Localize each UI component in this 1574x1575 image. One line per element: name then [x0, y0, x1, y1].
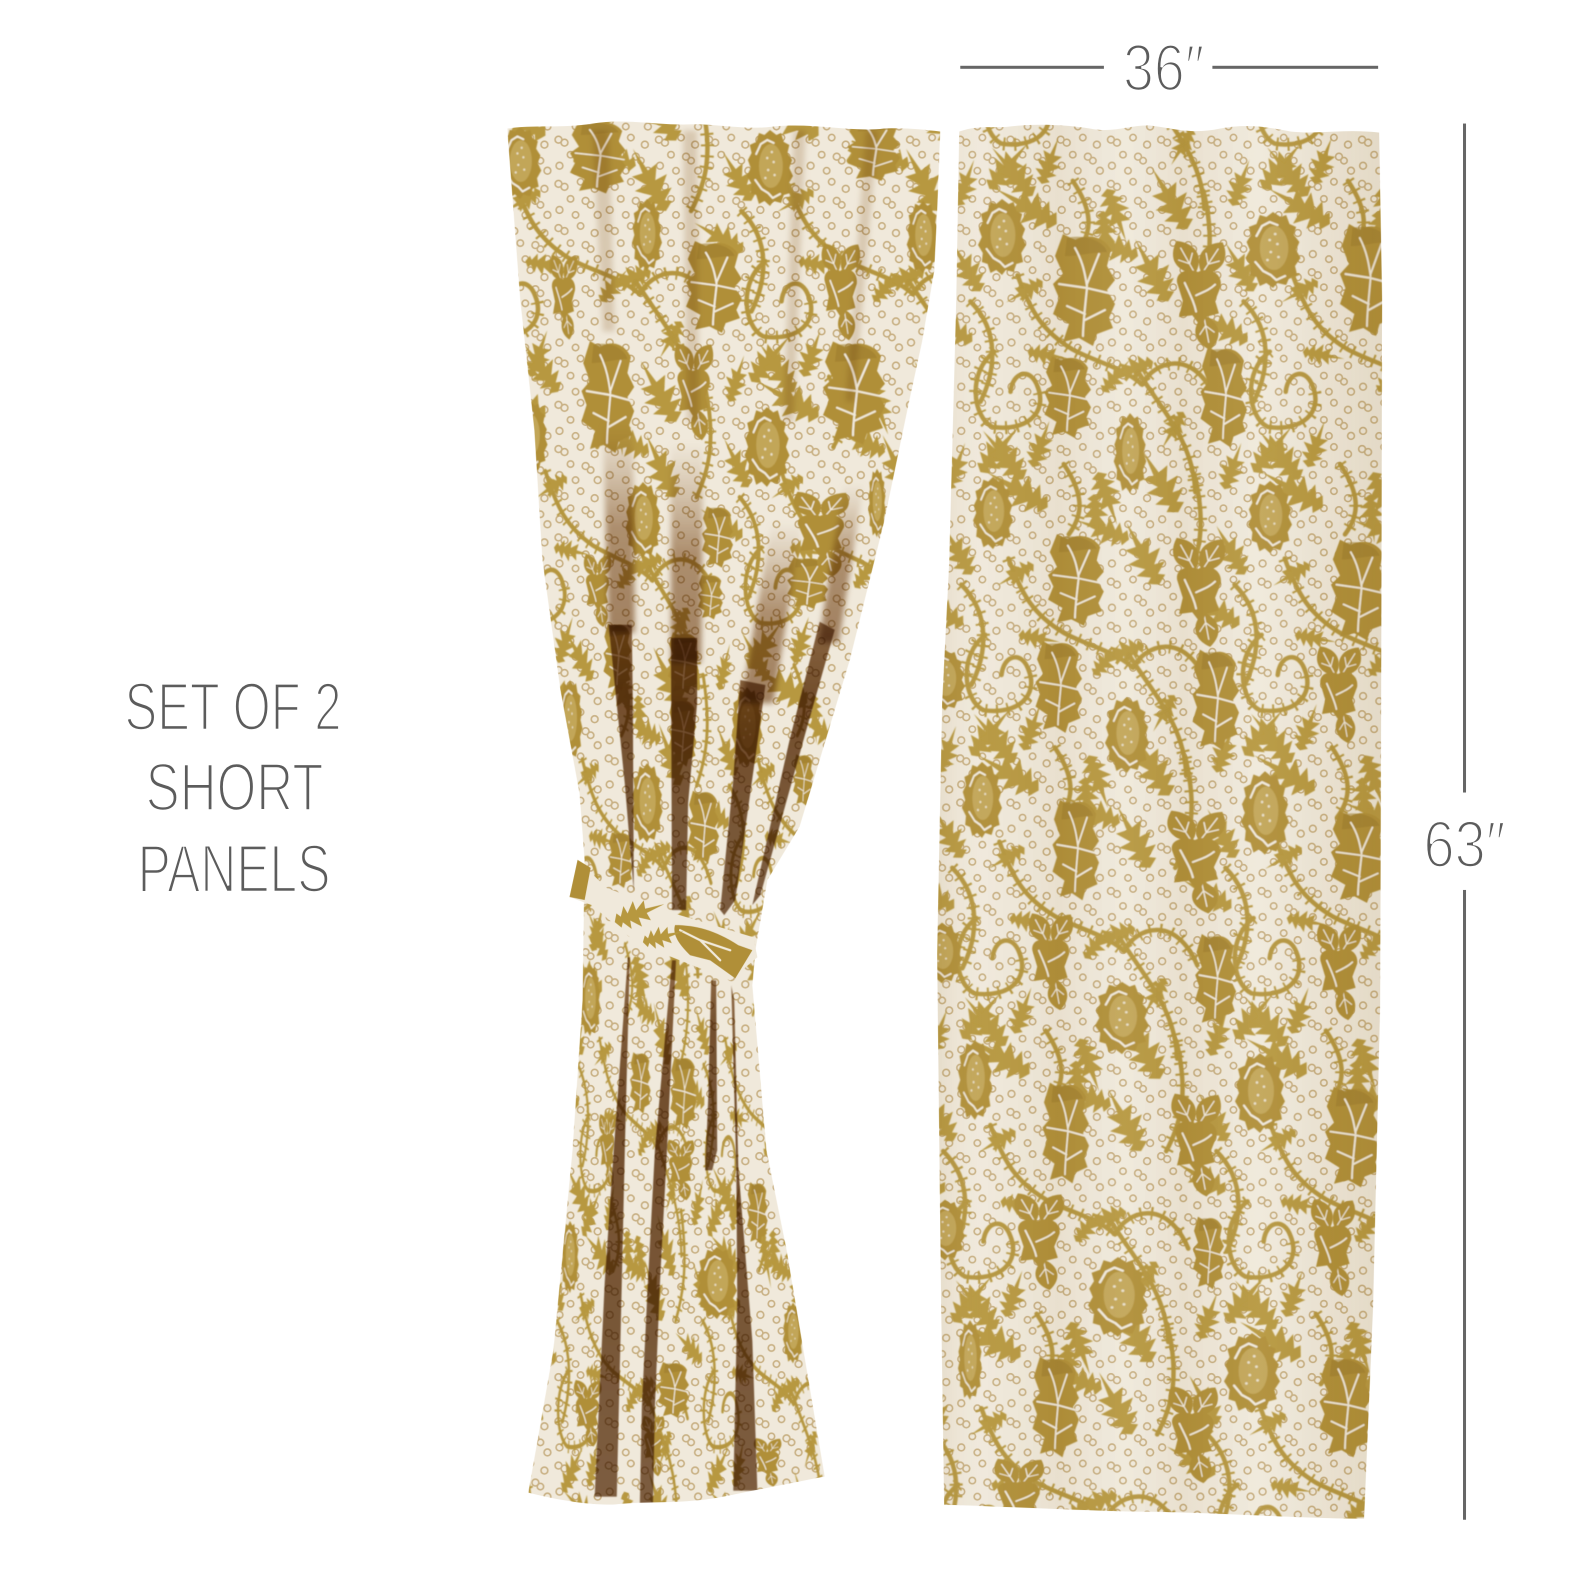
- dimension: width 36 inches: [960, 31, 1378, 105]
- tieback band: [570, 860, 757, 980]
- dimension: height 63 inches: 63″: [1423, 808, 1506, 882]
- dimension: width 36 inches: 36″: [1123, 31, 1204, 105]
- label: set of 2 short panels: [125, 670, 342, 907]
- label: set of 2 short panels: SET OF 2: [125, 670, 342, 745]
- label: set of 2 short panels: SHORT: [146, 751, 323, 826]
- panel: tied-back left curtain: [508, 122, 940, 1504]
- fold shadows: [593, 131, 878, 1504]
- dimension: height 63 inches: [1423, 124, 1506, 1520]
- label: set of 2 short panels: PANELS: [138, 832, 330, 907]
- panel: flat right curtain: [937, 66, 1382, 1519]
